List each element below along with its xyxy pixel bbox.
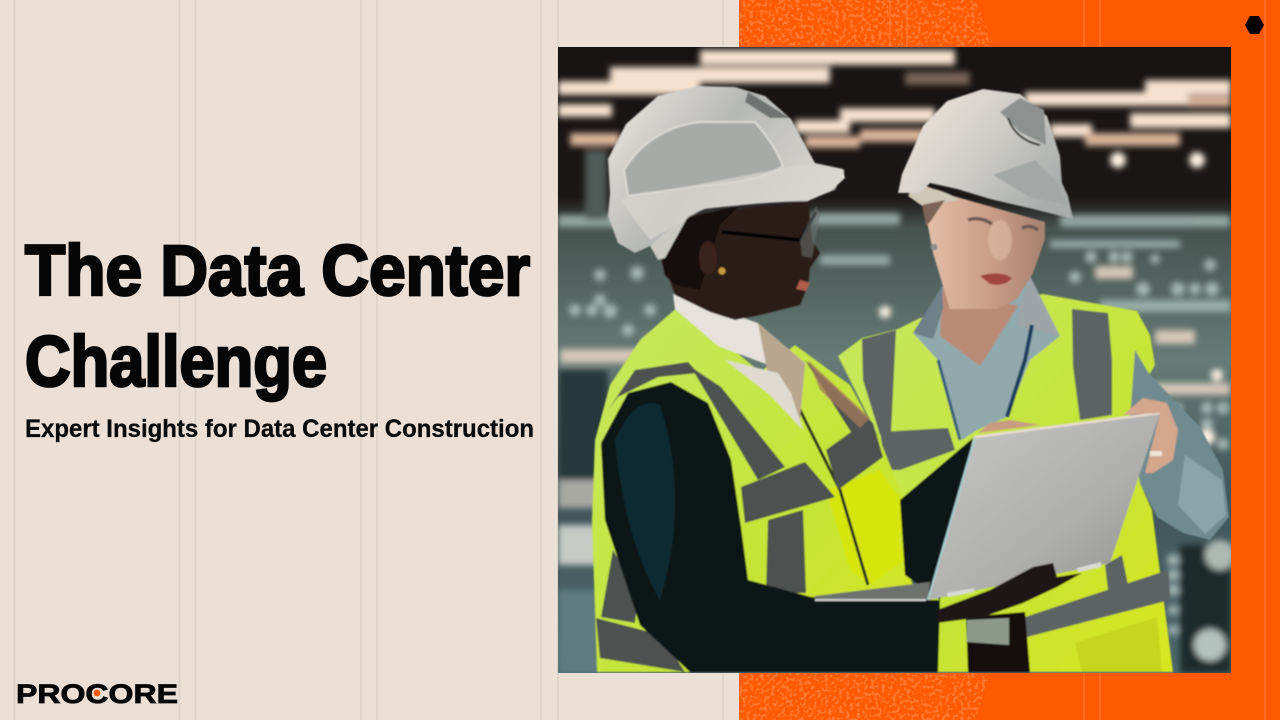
left beige panel: [0, 0, 739, 720]
icon: black hexagon: [1245, 16, 1264, 34]
left engineer forearm behind laptop: [900, 438, 973, 600]
right engineer face details: [931, 219, 1038, 285]
left engineer helmet: [608, 86, 845, 260]
left engineer arm: [601, 382, 940, 672]
hand holding laptop: [937, 563, 1082, 623]
person: right engineer: [838, 89, 1229, 672]
laptop: [815, 413, 1160, 600]
subtitle: Expert Insights for Data Center Construction: [25, 415, 534, 443]
dark shirt under vest: [966, 612, 1030, 672]
person: left engineer: [592, 86, 973, 672]
title: [25, 232, 530, 402]
right engineer helmet: [898, 89, 1073, 309]
title: The Data Center: [25, 232, 530, 311]
right engineer vest: [838, 294, 1173, 672]
photo background: blurred data center hall: [558, 47, 1235, 673]
left engineer vest: [592, 305, 940, 672]
right engineer sleeve: [1130, 350, 1229, 540]
left engineer collar and shirt: [673, 294, 805, 430]
title: Challenge: [25, 323, 327, 402]
right orange panel: [739, 0, 1280, 720]
hand gripping laptop edge: [1123, 398, 1178, 473]
hand on laptop top: [978, 420, 1040, 433]
left engineer head: [660, 201, 820, 320]
right engineer neck and shirt: [913, 276, 1060, 440]
right engineer reflective bands: [862, 309, 1170, 637]
photo: two engineers with a laptop in a data center: [558, 47, 1235, 673]
badge: [967, 618, 1009, 645]
logo: Procore: PROCORE: [16, 679, 178, 709]
right engineer pocket: [1075, 617, 1162, 672]
reflective glow on bands: [808, 360, 870, 428]
left engineer reflective bands: [596, 360, 883, 672]
